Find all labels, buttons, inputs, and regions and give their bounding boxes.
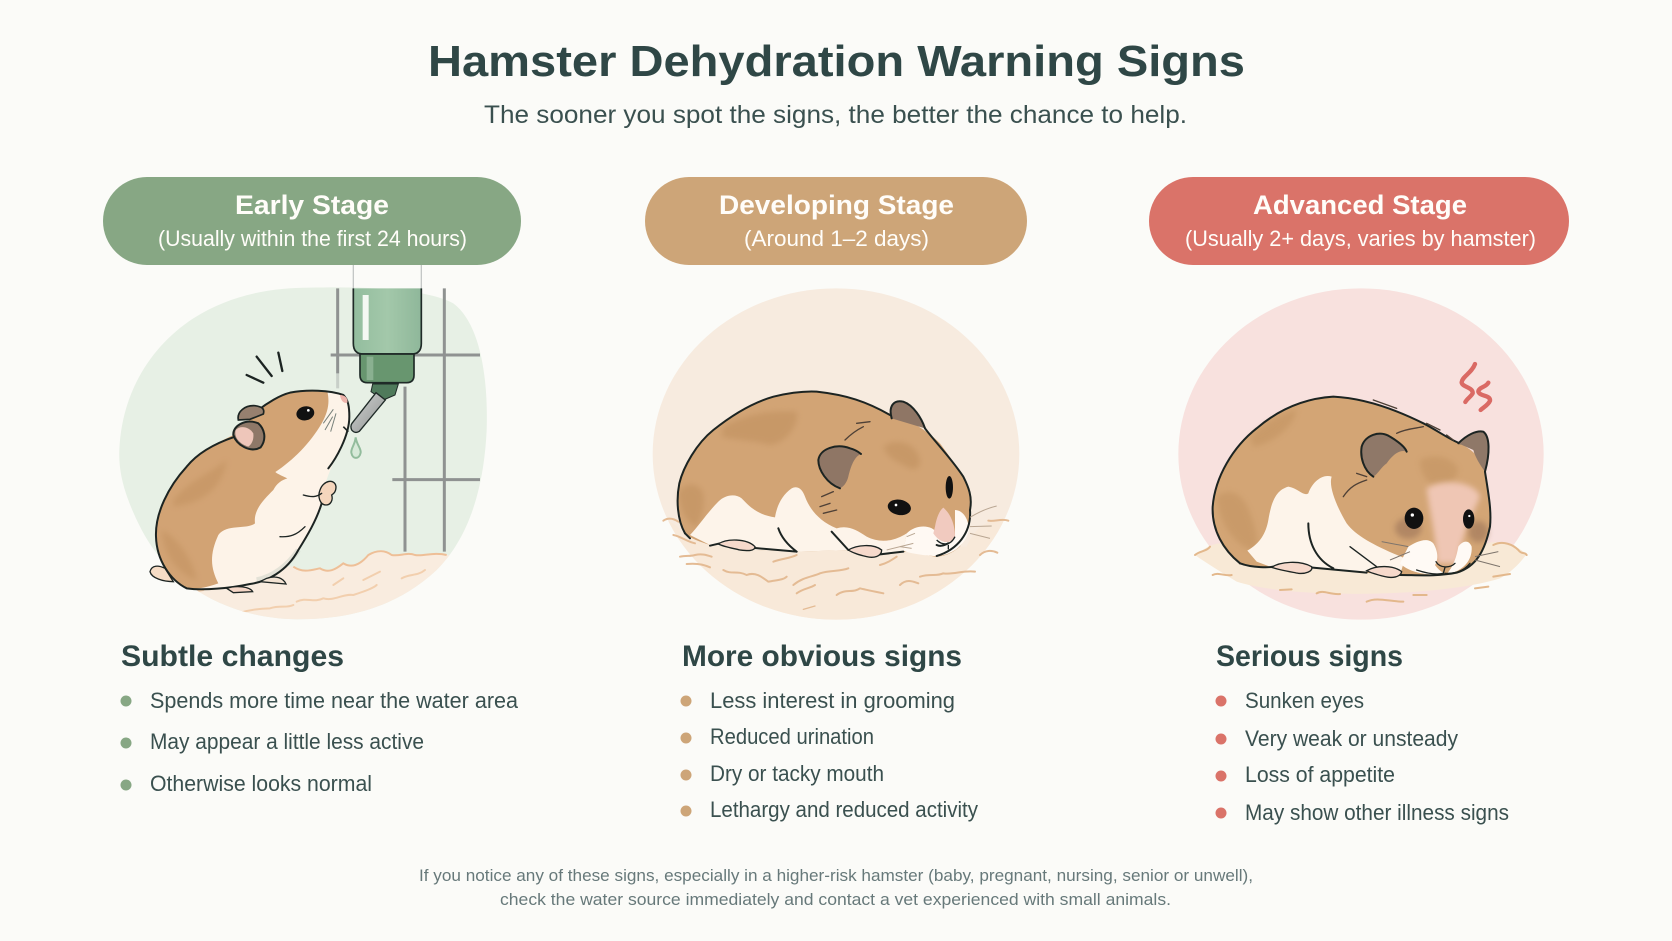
shading — [678, 411, 920, 527]
heading: serious signs: Serious signs — [1216, 640, 1403, 673]
pill title: Developing Stage — [719, 190, 954, 220]
whiskers — [323, 409, 336, 432]
bullet list: early: May appear a little less active — [150, 729, 424, 754]
heading: subtle changes: Subtle changes — [121, 640, 344, 673]
pill title: Advanced Stage — [1253, 190, 1467, 220]
pink snout — [1427, 482, 1480, 563]
nose and mouth — [937, 537, 955, 549]
illustration: hamster drinking from bottle — [119, 265, 487, 620]
bullet list: developing — [680, 688, 978, 822]
hamster — [678, 392, 997, 557]
illustration: weak hamster — [1178, 288, 1544, 620]
pill subtitle: (Around 1–2 days) — [744, 226, 929, 251]
bullet list: developing: Dry or tacky mouth — [710, 761, 884, 786]
panel: early stage — [90, 177, 521, 796]
pill subtitle: (Usually within the first 24 hours) — [158, 226, 467, 251]
near ear — [1361, 434, 1407, 477]
nose and mouth — [1417, 562, 1470, 574]
muzzle — [903, 510, 969, 556]
hamster — [150, 391, 349, 593]
muzzle — [1400, 540, 1447, 575]
bullet list: advanced — [1216, 688, 1509, 825]
paws — [718, 540, 755, 551]
footnote — [419, 866, 1253, 909]
ears — [238, 406, 264, 420]
background circle — [1178, 288, 1544, 620]
near ear — [818, 446, 861, 488]
bullet list: developing: Lethargy and reduced activity — [710, 797, 978, 822]
pill title: Early Stage — [235, 190, 389, 220]
shading — [1217, 410, 1458, 550]
far ear — [891, 401, 925, 428]
paws — [319, 481, 336, 505]
pill subtitle: (Usually 2+ days, varies by hamster) — [1185, 226, 1536, 251]
illustration: tired hamster — [652, 288, 1020, 620]
nose — [340, 395, 348, 403]
heading: more obvious signs: More obvious signs — [682, 640, 962, 673]
bedding — [196, 550, 450, 619]
bullet list: advanced: May show other illness signs — [1245, 800, 1509, 825]
footnote: If you notice any of these signs, especially in a higher-risk hamster (baby, pregnant, nursing, senior or unwell), — [419, 866, 1253, 885]
background circle — [653, 288, 1019, 620]
cage bars — [331, 288, 480, 552]
cream belly — [690, 487, 907, 555]
bullet list: advanced: Loss of appetite — [1245, 762, 1395, 787]
bullet list: developing: Less interest in grooming — [710, 688, 955, 713]
fur marks — [1343, 400, 1453, 497]
whiskers — [1382, 542, 1500, 567]
eyes — [1405, 508, 1423, 529]
outline — [678, 392, 971, 556]
eye — [295, 405, 316, 422]
cream belly — [1247, 476, 1405, 575]
subtitle: The sooner you spot the signs, the better the chance to help. — [484, 101, 1187, 129]
bullet list: early: Spends more time near the water area — [150, 688, 519, 713]
fur marks — [820, 422, 870, 513]
bullet list: early — [120, 688, 519, 796]
stage pill: developing — [645, 177, 1027, 265]
alert lines — [247, 353, 282, 383]
whiskers — [887, 506, 997, 550]
bedding — [1195, 542, 1527, 594]
water bottle — [351, 265, 421, 458]
background blob — [119, 287, 487, 619]
panel: advanced stage — [1149, 177, 1569, 825]
bedding — [668, 521, 1004, 620]
eye shadows — [1395, 518, 1422, 539]
bullet list: advanced: Very weak or unsteady — [1245, 726, 1458, 751]
paws — [1272, 562, 1312, 573]
distress squiggles — [1462, 364, 1490, 410]
eyes — [887, 498, 912, 517]
hamster — [1213, 397, 1500, 577]
bullet list: early: Otherwise looks normal — [150, 771, 372, 796]
panel: developing stage — [640, 177, 1040, 822]
far ear — [1458, 431, 1489, 472]
stage pill: advanced — [1149, 177, 1569, 265]
bullet list: developing: Reduced urination — [710, 724, 874, 749]
outline — [1213, 397, 1490, 575]
footnote: check the water source immediately and contact a vet experienced with small animals. — [500, 890, 1171, 909]
title: Hamster Dehydration Warning Signs — [428, 37, 1245, 86]
bullet list: advanced: Sunken eyes — [1245, 688, 1364, 713]
stage pill: early — [103, 177, 521, 265]
